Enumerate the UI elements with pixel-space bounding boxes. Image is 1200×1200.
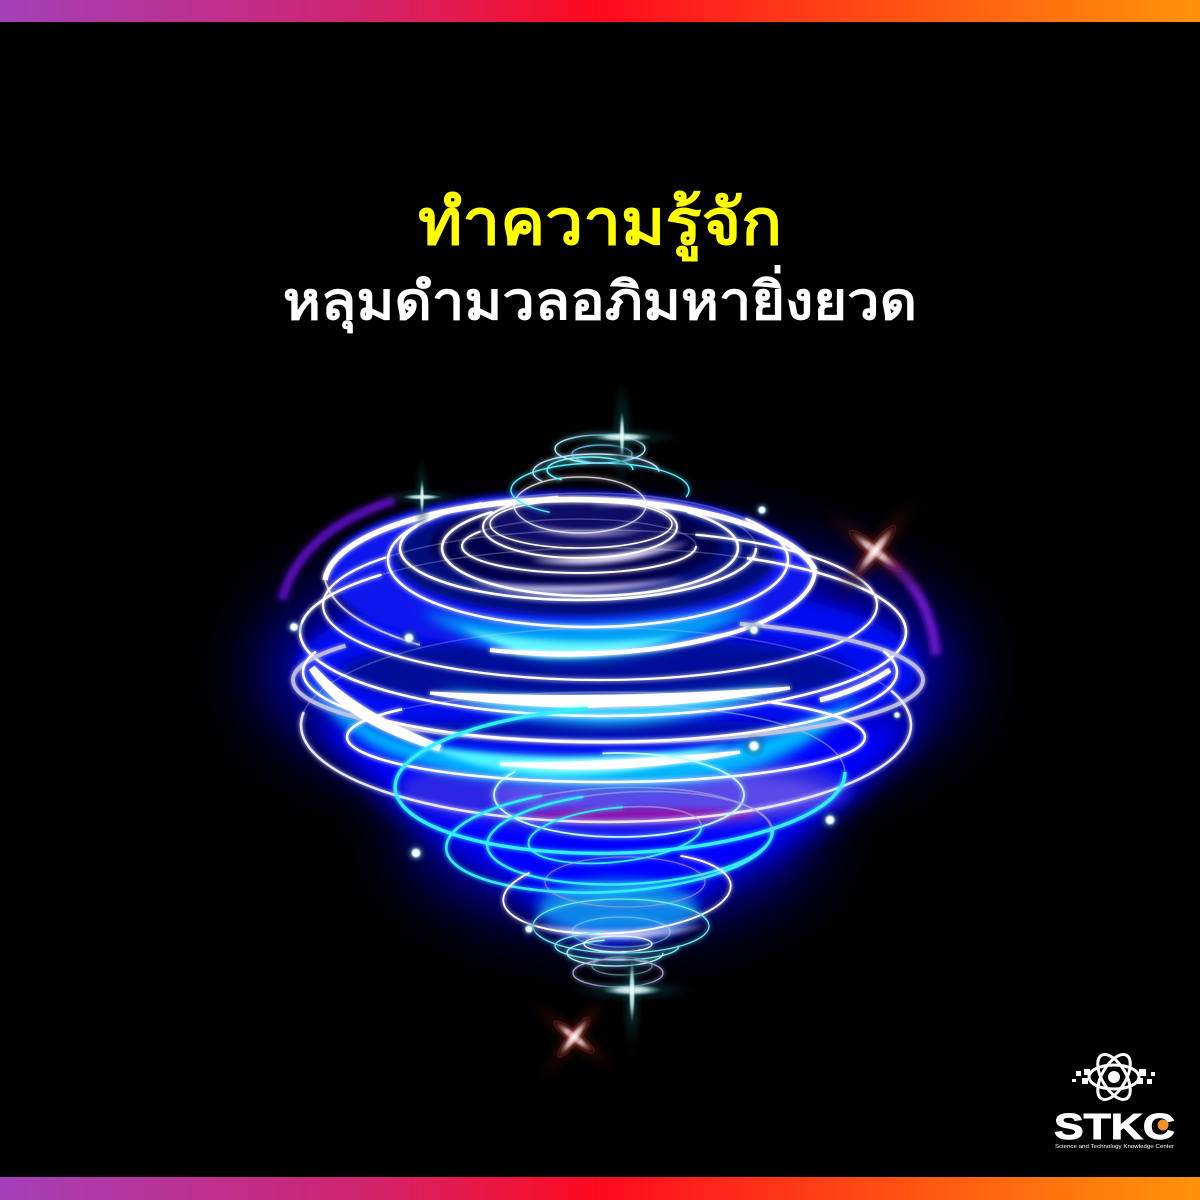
small rings, funnel tip [500,845,734,987]
sparkle: top [560,380,684,490]
logo orange dot [1158,1120,1168,1130]
sparkle: red bottom [497,960,651,1114]
logo wordmark: STKC [1054,1106,1175,1147]
logo pixel dots [1072,1069,1155,1084]
vortex body: middle bands [296,580,920,786]
white orbit rings, upper tier [325,477,815,656]
faint full orbit underlay [300,493,911,822]
faint grey back arcs, funnel [393,699,847,900]
sparkle: bottom [570,935,694,1055]
logo atom mark [1089,1049,1139,1105]
glowing dots [284,501,904,938]
cyan orbit rings, funnel [393,699,847,900]
title: line 1: ทำความรู้จัก [418,188,782,258]
vortex body: lower funnel [310,720,920,950]
outer blue halo [265,500,955,920]
logo caption: Science and Technology Knowledge Center [1055,1144,1174,1150]
bottom gradient bar [0,1177,1200,1200]
sparkle: left [380,457,464,537]
cyan orbit rings, crown [511,435,689,517]
top gradient bar [0,0,1200,22]
logo: STKC [1054,1049,1175,1150]
title: line 2: หลุมดำมวลอภิมหายิ่งยวด [283,273,917,331]
vortex body: upper dome [327,491,813,659]
white orbit rings, middle tier [293,530,923,822]
sparkle: red right [780,456,970,646]
